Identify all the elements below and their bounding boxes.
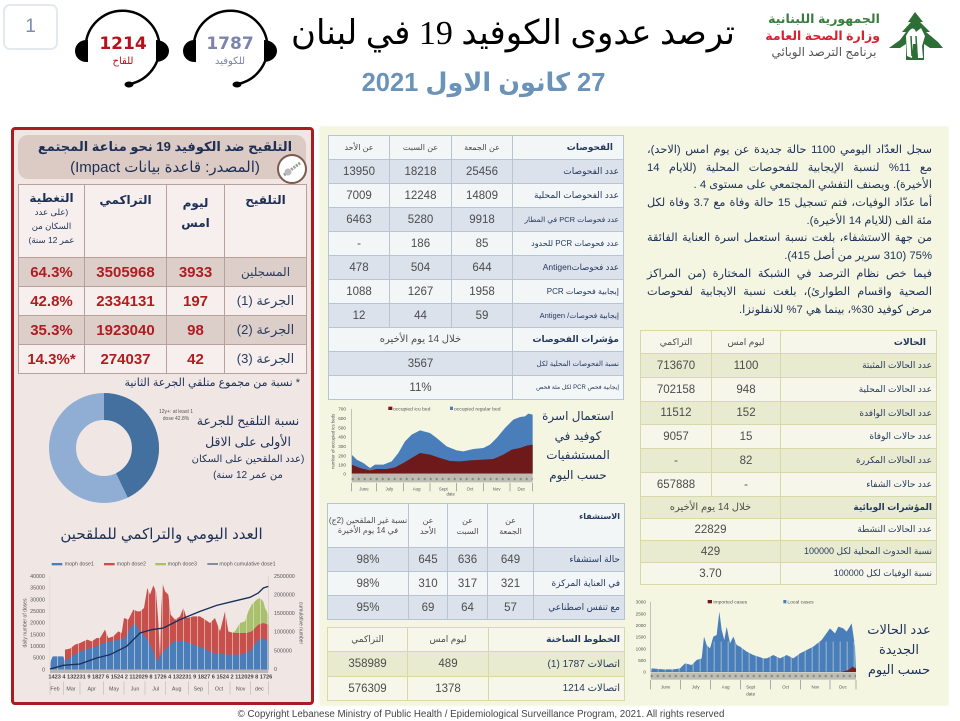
table: hospitalisation: 310: [418, 578, 438, 590]
table: hotlines: الخطوط الساخنة: [546, 634, 620, 644]
chart: hospital bed occupancy: 400: [338, 435, 346, 440]
text block: daily summary: مع 11% لنسبة الإيجابية للفحوصات المحلية (للايام 14: [647, 162, 932, 174]
ministry name lines: [765, 12, 880, 59]
text block: daily summary: مئة الف (للايام 14 الأخيرة).: [807, 215, 932, 227]
chart: new cases per day: Dec: [839, 684, 848, 689]
table: tests: إيجابية فحص PCR لكل مئة فحص: [536, 385, 619, 391]
table: cases: عدد الحالات النشطة: [857, 524, 932, 534]
table: hospitalisation: السبت: [456, 526, 479, 536]
chart: new cases per day: June: [661, 684, 671, 689]
chart: hospital bed occupancy: July: [385, 487, 394, 492]
chart: hospital bed occupancy: date: [446, 492, 455, 497]
table: cases: عدد الحالات المحلية: [859, 384, 932, 394]
table: hospitalisation: 317: [458, 578, 477, 590]
table: vaccination figures: الجرعة (2): [237, 322, 294, 337]
table: tests: مؤشرات الفحوصات: [533, 334, 619, 344]
chart: hospital bed occupancy: 500: [338, 426, 346, 431]
text: 1500000: [274, 611, 295, 617]
chart: daily vaccination doses: Sep: [194, 687, 203, 693]
table: vaccination figures: 2334131: [96, 292, 155, 310]
table: tests: 13950: [343, 166, 375, 178]
table: vaccination figures: الجرعة (3): [237, 351, 294, 366]
table: cases: 15: [740, 430, 752, 442]
table: tests: 11%: [409, 382, 432, 394]
chart: new cases per day: date: [746, 691, 756, 696]
table: tests: إيجابية فحوصات/ Antigen: [540, 311, 619, 320]
table: tests: 3567: [408, 358, 433, 370]
chart: daily vaccination doses: Oct: [215, 687, 224, 693]
table: tests: 7009: [346, 190, 372, 202]
table: hospitalisation: 649: [501, 554, 520, 566]
table: cases: 3.70: [699, 568, 722, 580]
table: tests: إيجابية فحوصات PCR: [547, 287, 619, 296]
table: cases: ليوم امس: [728, 336, 764, 346]
table: tests: 44: [414, 310, 427, 322]
chart: new cases per day: Sept: [746, 684, 756, 689]
chart: daily vaccination doses: 20000: [30, 621, 45, 627]
table: cases: -: [744, 478, 748, 490]
chart: daily vaccination doses: daily number of doses: [23, 598, 29, 648]
table: vaccination figures: 42: [187, 350, 204, 368]
table: vaccination figures: التراكمي: [99, 193, 152, 207]
text block: daily summary: 75% (310 سرير من أصل 415).: [784, 250, 932, 262]
ministry name lines: برنامج الترصد الوبائي: [771, 45, 877, 59]
table: vaccination figures: 98: [187, 322, 204, 338]
table: tests: عن الأحد: [344, 143, 374, 152]
chart: daily vaccination doses: 30000: [30, 598, 45, 604]
chart: daily vaccination doses: Jul: [152, 687, 159, 693]
table: cases: 9057: [663, 430, 689, 442]
table: vaccination figures: عمر 12 سنة): [29, 235, 74, 245]
table: hospitalisation: الجمعة: [499, 526, 522, 536]
chart: hospital bed occupancy: 300: [338, 444, 346, 449]
table: tests: عن الجمعة: [464, 143, 500, 152]
new cases caption: عدد الحالات: [867, 622, 931, 637]
table: hospitalisation: 69: [422, 602, 434, 614]
table: cases: 702158: [657, 384, 695, 396]
chart: daily vaccination doses: dec: [255, 687, 264, 693]
hospital chart caption: كوفيد في: [555, 428, 601, 442]
chart: new cases per day: 500: [638, 658, 646, 663]
table: tests: عن السبت: [403, 143, 438, 152]
donut chart: first dose coverage: [49, 393, 159, 503]
chart: hospital bed occupancy: June: [359, 487, 369, 492]
chart: daily vaccination doses: moph dose1: [65, 562, 94, 568]
chart: daily vaccination doses: 0: [274, 667, 277, 673]
table: cases: 82: [740, 454, 752, 466]
table: vaccination figures: التلقيح: [245, 193, 286, 207]
table: cases: 429: [701, 546, 720, 558]
table: tests: 14809: [466, 190, 498, 202]
table: cases: 657888: [657, 478, 695, 490]
chart: new cases per day: July: [692, 684, 700, 689]
table: vaccination figures: (على عدد: [35, 207, 68, 217]
table: tests: 478: [349, 262, 369, 274]
table: cases: [640, 330, 937, 585]
hospital chart caption: استعمال اسرة: [542, 409, 614, 423]
chart: new cases per day: 0: [643, 670, 646, 675]
hospital chart caption: [542, 409, 614, 482]
table: tests: نسبة الفحوصات المحلية لكل: [537, 360, 619, 368]
table: hospitalisation: نسبة غير الملقحين (2ج) في 14 يوم الأخيرة: [329, 516, 407, 534]
chart: new cases per day: Nov: [811, 684, 820, 689]
ministry name lines: وزارة الصحة العامة: [765, 28, 880, 42]
table: vaccination figures: [18, 184, 307, 374]
table: cases: 152: [736, 407, 756, 419]
table: vaccination figures: التغطية: [29, 191, 74, 205]
table: tests: 1088: [346, 286, 372, 298]
table: hospitalisation: 95%: [356, 602, 380, 614]
chart: daily vaccination doses: Apr: [88, 687, 96, 693]
table: hospitalisation: في العناية المركزة: [551, 578, 620, 588]
hospital chart caption: المستشفيات: [546, 448, 610, 462]
table: vaccination figures: المسجلين: [241, 265, 290, 279]
table: tests: 504: [411, 262, 430, 274]
number 1787: 1787: [206, 34, 254, 54]
text: 2000000: [274, 593, 295, 599]
label covid line: للكوفيد: [215, 56, 245, 67]
chart: daily vaccination doses: May: [109, 687, 119, 693]
table: hotlines: 358989: [348, 658, 387, 670]
table: hospitalisation: 98%: [356, 578, 380, 590]
table: cases: الحالات: [894, 336, 926, 346]
new cases caption: [867, 622, 931, 678]
table: cases: المؤشرات الوبائية: [853, 502, 932, 512]
table: vaccination figures: 3505968: [96, 264, 155, 280]
chart: daily vaccination doses: moph dose3: [168, 562, 197, 568]
donut caption: نسبة التلقيح للجرعة: [197, 414, 299, 428]
chart: hospital bed occupancy: number of occupied ics beds: [331, 414, 336, 469]
table: cases: عدد حالات الوفاة: [869, 431, 932, 441]
table: vaccination figures: ليوم: [183, 196, 208, 210]
footer copyright: © Copyright Lebanese Ministry of Public Health / Epidemiological Surveillance Program, 2021. All rights reserved: [238, 709, 724, 720]
chart: hospital bed occupancy: occupied icu bed: [393, 407, 431, 413]
number 1214: 1214: [99, 34, 147, 54]
table: tests: 5280: [408, 214, 433, 226]
table: tests: عدد الفحوصات: [563, 166, 619, 176]
chart: new cases per day: 1000: [636, 646, 646, 651]
chart: new cases per day: 3000: [636, 599, 646, 604]
table: tests: عدد الفحوصات المحلية: [534, 190, 619, 200]
page number box: 1: [25, 16, 36, 37]
table: cases: 11512: [660, 407, 692, 419]
chart: hospital bed occupancy: Sept: [439, 487, 449, 492]
chart: daily vaccination doses: [22, 562, 304, 695]
table: tests: 85: [476, 238, 488, 250]
table: hospitalisation: الأحد: [420, 526, 436, 536]
chart: hospital bed occupancy: Aug: [413, 487, 421, 492]
donut caption: الأولى على الاقل: [205, 435, 291, 449]
table: hospitalisation: مع تنفس اصطناعي: [548, 602, 620, 612]
table: tests: 12: [353, 310, 365, 322]
chart: hospital bed occupancy: occupied regular bed: [454, 407, 501, 413]
chart: daily vaccination doses: 0: [42, 668, 45, 674]
chart: new cases per day: Oct: [782, 684, 790, 689]
table: cases: نسبة الوفيات لكل 100000: [834, 568, 932, 578]
title: ترصد عدوى الكوفيد 19 في لبنان: [291, 15, 735, 52]
table: hospitalisation: عن: [462, 516, 473, 524]
chart: hospital bed occupancy: 700: [338, 407, 346, 412]
table: tests: خلال 14 يوم الأخيره: [380, 334, 461, 345]
table: tests: عدد فحوصات PCR في المطار: [524, 215, 619, 224]
donut caption: [192, 414, 304, 481]
chart: daily vaccination doses: 5000: [33, 656, 45, 662]
source line: (المصدر: قاعدة بيانات Impact): [70, 159, 260, 176]
table: hospitalisation: 57: [504, 602, 517, 614]
footnote: third dose: * نسبة من مجموع متلقي الجرعة الثانية: [124, 377, 300, 389]
table: vaccination figures: 35.3%: [30, 322, 73, 338]
table: cases: 22829: [694, 524, 726, 536]
chart: hospital bed occupancy: 0: [343, 472, 346, 477]
chart: hospital bed occupancy: Nov: [493, 487, 501, 492]
text block: daily summary: [646, 144, 932, 316]
table: tests: 1267: [408, 286, 433, 298]
date subtitle: 27 كانون الاول 2021: [362, 69, 605, 97]
chart: daily vaccination doses: 10000: [30, 644, 45, 650]
text block: daily summary: فيما خص نظام الترصد في الشبكة المختارة (من المراكز: [647, 268, 932, 280]
chart: daily vaccination doses: Mar: [66, 687, 76, 693]
chart: hospital bed occupancy: 100: [338, 463, 346, 468]
table: hospitalisation: [327, 503, 625, 620]
chart: daily vaccination doses: Nov: [236, 687, 246, 693]
table: cases: 713670: [657, 360, 695, 372]
table: vaccination figures: 1923040: [96, 322, 155, 338]
ministry name lines: الجمهورية اللبنانية: [768, 12, 880, 26]
table: vaccination figures: السكان من: [32, 221, 71, 231]
table: tests: 25456: [466, 166, 498, 178]
chart: new cases per day: Aug: [722, 684, 730, 689]
chart: new cases per day: [636, 599, 856, 696]
table: tests: 18218: [404, 166, 436, 178]
table: tests: عدد فحوصاتAntigen: [543, 262, 619, 272]
table: hotlines: 576309: [348, 682, 387, 694]
chart: hospital bed occupancy: 600: [338, 416, 346, 421]
table: hospitalisation: عن: [423, 516, 433, 524]
table: cases: 948: [736, 384, 756, 396]
text block: daily summary: أما عدّاد الوفيات، فتم تسجيل 15 حالة وفاة مع 3.7 وفاة لكل: [647, 197, 932, 209]
chart: daily vaccination doses: 40000: [30, 574, 45, 580]
table: hotlines: 1378: [435, 682, 461, 694]
chart: daily vaccination doses: moph dose2: [117, 562, 146, 568]
table: hospitalisation: 321: [501, 578, 520, 590]
text: 2500000: [274, 574, 295, 580]
table: tests: عدد فحوصات PCR للحدود: [531, 239, 619, 248]
table: vaccination figures: 64.3%: [30, 264, 73, 280]
table: tests: 12248: [404, 190, 436, 202]
donut caption: من عمر 12 سنة): [213, 470, 283, 481]
table: hospitalisation: حالة استشفاء: [569, 554, 620, 564]
table: hotlines: التراكمي: [351, 634, 384, 644]
table: tests: -: [357, 238, 361, 250]
table: hospitalisation: الاستشفاء: [579, 512, 620, 521]
table: tests: 186: [411, 238, 430, 250]
text block: daily summary: سجل العدّاد اليومي 1100 حالة جديدة عن يوم امس (الاحد)،: [647, 144, 932, 156]
table: vaccination figures: امس: [181, 216, 210, 230]
table: vaccination figures: 274037: [100, 350, 151, 368]
chart: daily vaccination doses: 1423 4 132231 9 1827 6 1524 2 112029 8 1726 4 132231 9 1827 6 1524 2 112029 8 1726: [48, 675, 272, 681]
icon: cedar tree: [889, 12, 943, 60]
text: 1000000: [274, 630, 295, 636]
text: cumulative number: [297, 602, 303, 645]
table: cases: التراكمي: [660, 336, 692, 346]
chart: daily vaccination doses: Feb: [50, 687, 60, 693]
table: tests: 59: [476, 310, 488, 322]
page number box: [3, 4, 58, 50]
ministry logo: [765, 12, 943, 60]
chart: hospital bed occupancy: 200: [338, 454, 346, 459]
table: hotlines: ليوم امس: [430, 634, 466, 644]
hospital chart caption: حسب اليوم: [549, 468, 607, 482]
table: tests: 6463: [346, 214, 372, 226]
heading: daily and cumulative: العدد اليومي والتراكمي للملقحين: [60, 526, 263, 543]
table: hospitalisation: 64: [461, 602, 474, 614]
text block: daily summary: الأخيرة). ويصنف التفشي المجتمعي على مستوى 4 .: [694, 179, 932, 191]
chart: hospital bed occupancy: Dec: [517, 487, 526, 492]
donut caption: (عدد الملقحين على السكان: [192, 454, 304, 465]
chart: daily vaccination doses: 15000: [30, 633, 45, 639]
table: hospitalisation: 636: [458, 554, 477, 566]
table: hospitalisation: 645: [418, 554, 438, 566]
table: cases: -: [674, 454, 678, 466]
table: tests: 1958: [469, 286, 495, 298]
table: tests: [328, 135, 624, 400]
table: hotlines: اتصالات 1787 (1): [548, 658, 620, 670]
text block: daily summary: من جهة الاستشفاء، بلغت نسبة استعمل اسرة العناية الفائقة: [647, 232, 932, 244]
panel: vaccination: [11, 127, 314, 705]
chart: new cases per day: 1500: [636, 635, 646, 640]
text block: daily summary: الصحية واقسام الطوارئ)، بلغت نسبة الايجابية لفحوصات: [647, 286, 932, 298]
donut label: 12y+: at least 1 dose 42.8%: [159, 409, 193, 422]
chart: daily vaccination doses: Aug: [172, 687, 181, 693]
icon: vaccine syringe: [277, 154, 307, 184]
chart: hospital bed occupancy: Oct: [467, 487, 474, 492]
table: vaccination figures: 42.8%: [30, 292, 73, 310]
chart: hospital bed occupancy: [331, 406, 533, 497]
heading line: التلقيح ضد الكوفيد 19 نحو مناعة المجتمع: [38, 139, 292, 154]
chart: new cases per day: Local cases: [787, 599, 814, 605]
table: tests: 644: [472, 262, 492, 274]
table: cases: عدد الحالات المثبتة: [862, 360, 932, 370]
table: hotlines: 489: [438, 658, 458, 670]
table: vaccination figures: 14.3%*: [27, 350, 76, 368]
table: hotlines: [327, 627, 625, 701]
table: tests: الفحوصات: [567, 142, 613, 152]
chart: daily vaccination doses: 25000: [30, 609, 45, 615]
table: cases: خلال 14 يوم الأخيره: [670, 502, 751, 513]
table: cases: نسبة الحدوث المحلية لكل 100000: [804, 546, 932, 556]
chart: new cases per day: imported cases: [713, 599, 748, 605]
chart: daily vaccination doses: 35000: [30, 586, 45, 592]
new cases caption: حسب اليوم: [868, 662, 930, 677]
text: 500000: [274, 649, 292, 655]
chart: daily vaccination doses: Jun: [131, 687, 139, 693]
table: cases: عدد الحالات الوافدة: [859, 408, 932, 418]
table: hospitalisation: عن: [505, 516, 516, 524]
table: cases: عدد حالات الشفاء: [866, 479, 932, 489]
new cases caption: الجديدة: [879, 642, 919, 657]
table: hospitalisation: 98%: [356, 554, 380, 566]
table: cases: عدد الحالات المكررة: [856, 455, 932, 465]
table: vaccination figures: 197: [183, 292, 208, 310]
hotline 1787 headset badge: [183, 10, 277, 88]
hotline 1214 headset badge: [75, 10, 169, 88]
chart: new cases per day: 2500: [636, 611, 646, 616]
panel heading: vaccination: [18, 135, 306, 179]
table: vaccination figures: 3933: [179, 264, 212, 280]
text block: daily summary: مرض كوفيد 30%، بينما هي 7% للانفلونزا.: [739, 304, 932, 316]
table: hotlines: اتصالات 1214: [563, 683, 620, 694]
panel: surveillance: [320, 127, 948, 705]
table: cases: 1100: [734, 360, 758, 372]
table: vaccination figures: الجرعة (1): [237, 293, 294, 308]
chart: new cases per day: 2000: [636, 623, 646, 628]
table: tests: 9918: [469, 214, 495, 226]
chart: daily vaccination doses: moph cumulative dose1: [219, 562, 276, 568]
label vaccine line: للقاح: [113, 56, 133, 67]
